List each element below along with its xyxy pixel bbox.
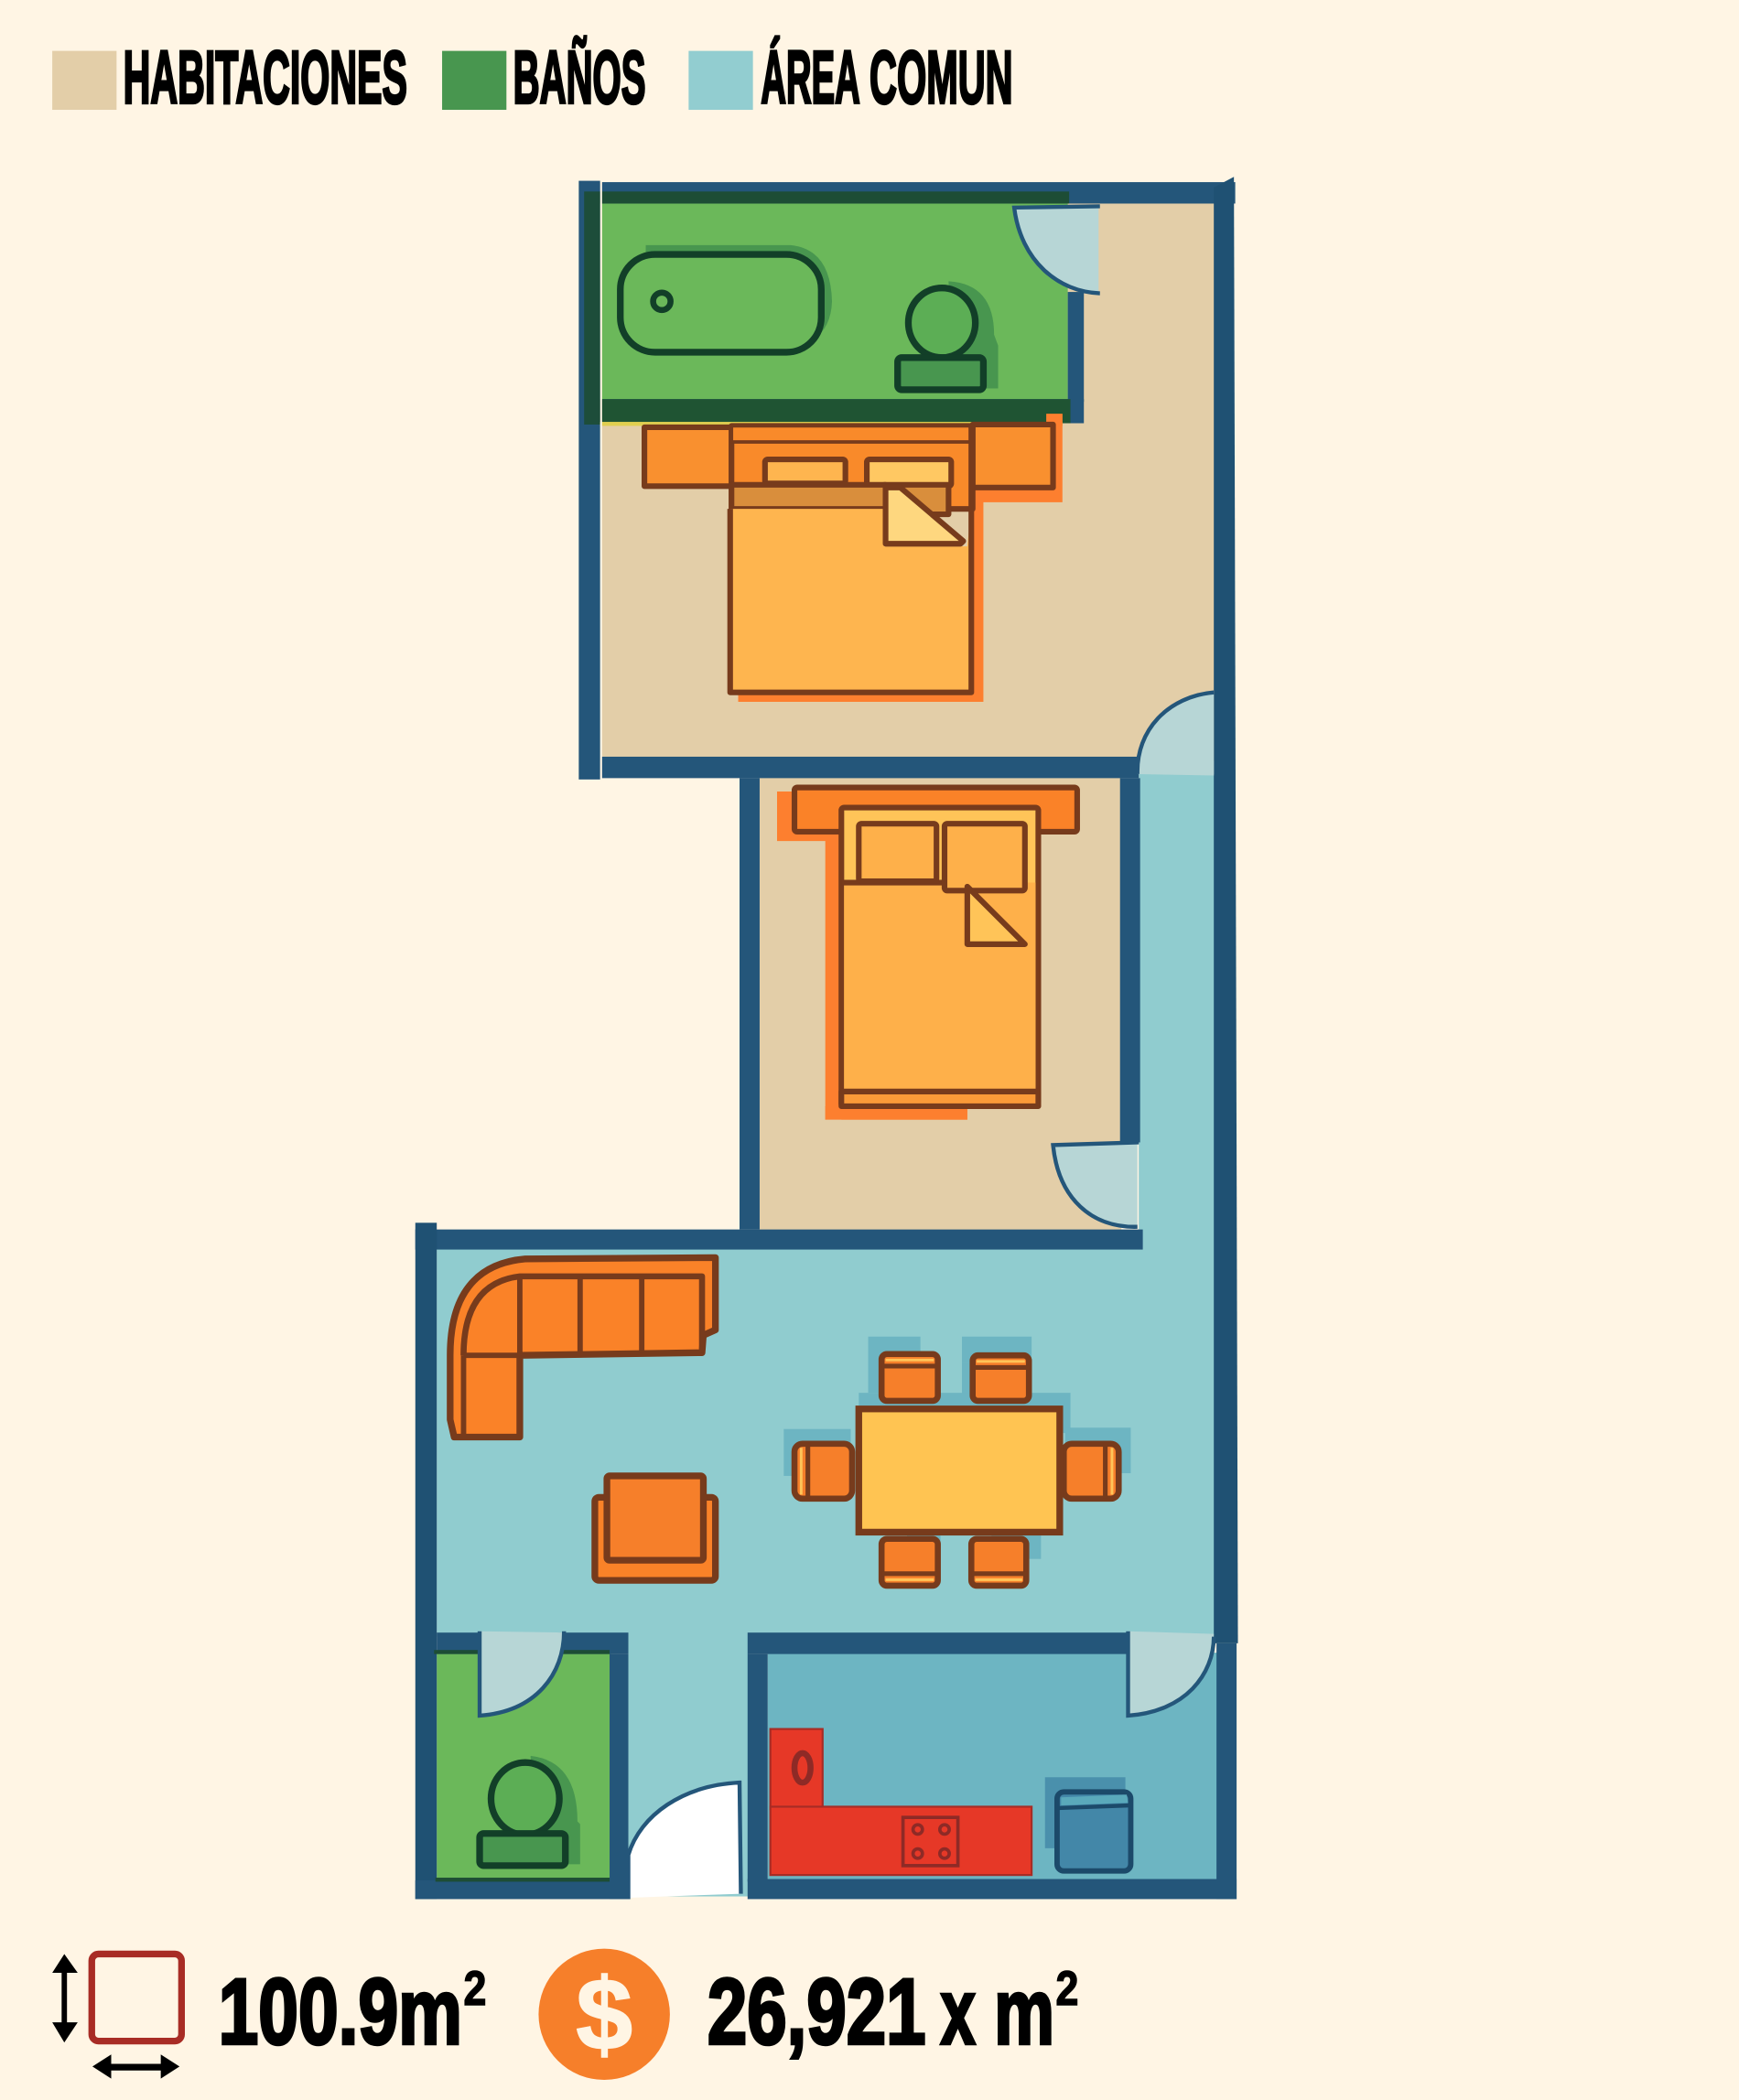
area value: 100.9m [219, 1959, 462, 2064]
legend item: habitaciones: HABITACIONES [124, 37, 407, 120]
footer [841, 1092, 1038, 1106]
bed 1 [644, 414, 1063, 702]
pillows [859, 824, 936, 881]
table [859, 1409, 1060, 1532]
headboard [794, 788, 1077, 832]
frame [841, 808, 1038, 1106]
headboard [731, 425, 973, 509]
area icon [52, 1954, 181, 2079]
price value: x [941, 1959, 976, 2064]
area value: 2 [463, 1962, 486, 2016]
legend item: área común [688, 37, 1013, 120]
legend item: área común: COMUN [870, 37, 1013, 120]
dining table and chairs [783, 1337, 1130, 1586]
legend item: baños [442, 37, 646, 120]
legend item: área común: ÁREA [761, 37, 860, 120]
legend item: habitaciones [52, 37, 407, 120]
pillows [765, 459, 846, 483]
kitchen counter [771, 1729, 1032, 1875]
walls [416, 177, 1238, 1899]
band [731, 485, 886, 509]
floor plan [416, 177, 1238, 1899]
door: kitchen [1129, 1632, 1214, 1716]
door: bathroom 2 [480, 1632, 564, 1716]
blanket [844, 883, 1036, 1092]
legend: BAÑOS [513, 37, 646, 120]
legend [52, 37, 1013, 120]
chairs [794, 1354, 1118, 1586]
bathtub [621, 245, 832, 352]
horizontal arrow [92, 2054, 179, 2079]
sink [794, 1753, 811, 1782]
door: bedroom 2 [1053, 1142, 1139, 1227]
price value: 26,921 [707, 1959, 925, 2064]
fold [886, 488, 963, 544]
toilet: bathroom 1 [898, 281, 999, 390]
shadow [739, 414, 1063, 702]
stove [903, 1817, 958, 1866]
bathroom 1 wall overlay [584, 181, 1071, 780]
nightstands [644, 427, 731, 486]
sofa [450, 1257, 716, 1437]
price value: m [994, 1959, 1054, 2064]
mattress [730, 509, 971, 691]
floors [437, 201, 1218, 1897]
door: main entrance [629, 1782, 740, 1899]
fridge [1045, 1777, 1130, 1871]
fold [967, 887, 1025, 944]
armchair [595, 1476, 716, 1580]
bed 2 [777, 788, 1077, 1120]
bathroom 2 wall overlay [434, 1650, 610, 1881]
price icon [538, 1949, 670, 2080]
door: bathroom 1 [1014, 205, 1100, 294]
price value: 2 [1055, 1962, 1078, 2016]
door: bedroom 1 [1138, 693, 1214, 775]
price icon: $ [576, 1956, 632, 2071]
shadow [777, 792, 967, 1120]
vertical arrow [52, 1954, 78, 2042]
toilet: bathroom 2 [480, 1756, 580, 1866]
chair shadows [783, 1337, 1130, 1559]
